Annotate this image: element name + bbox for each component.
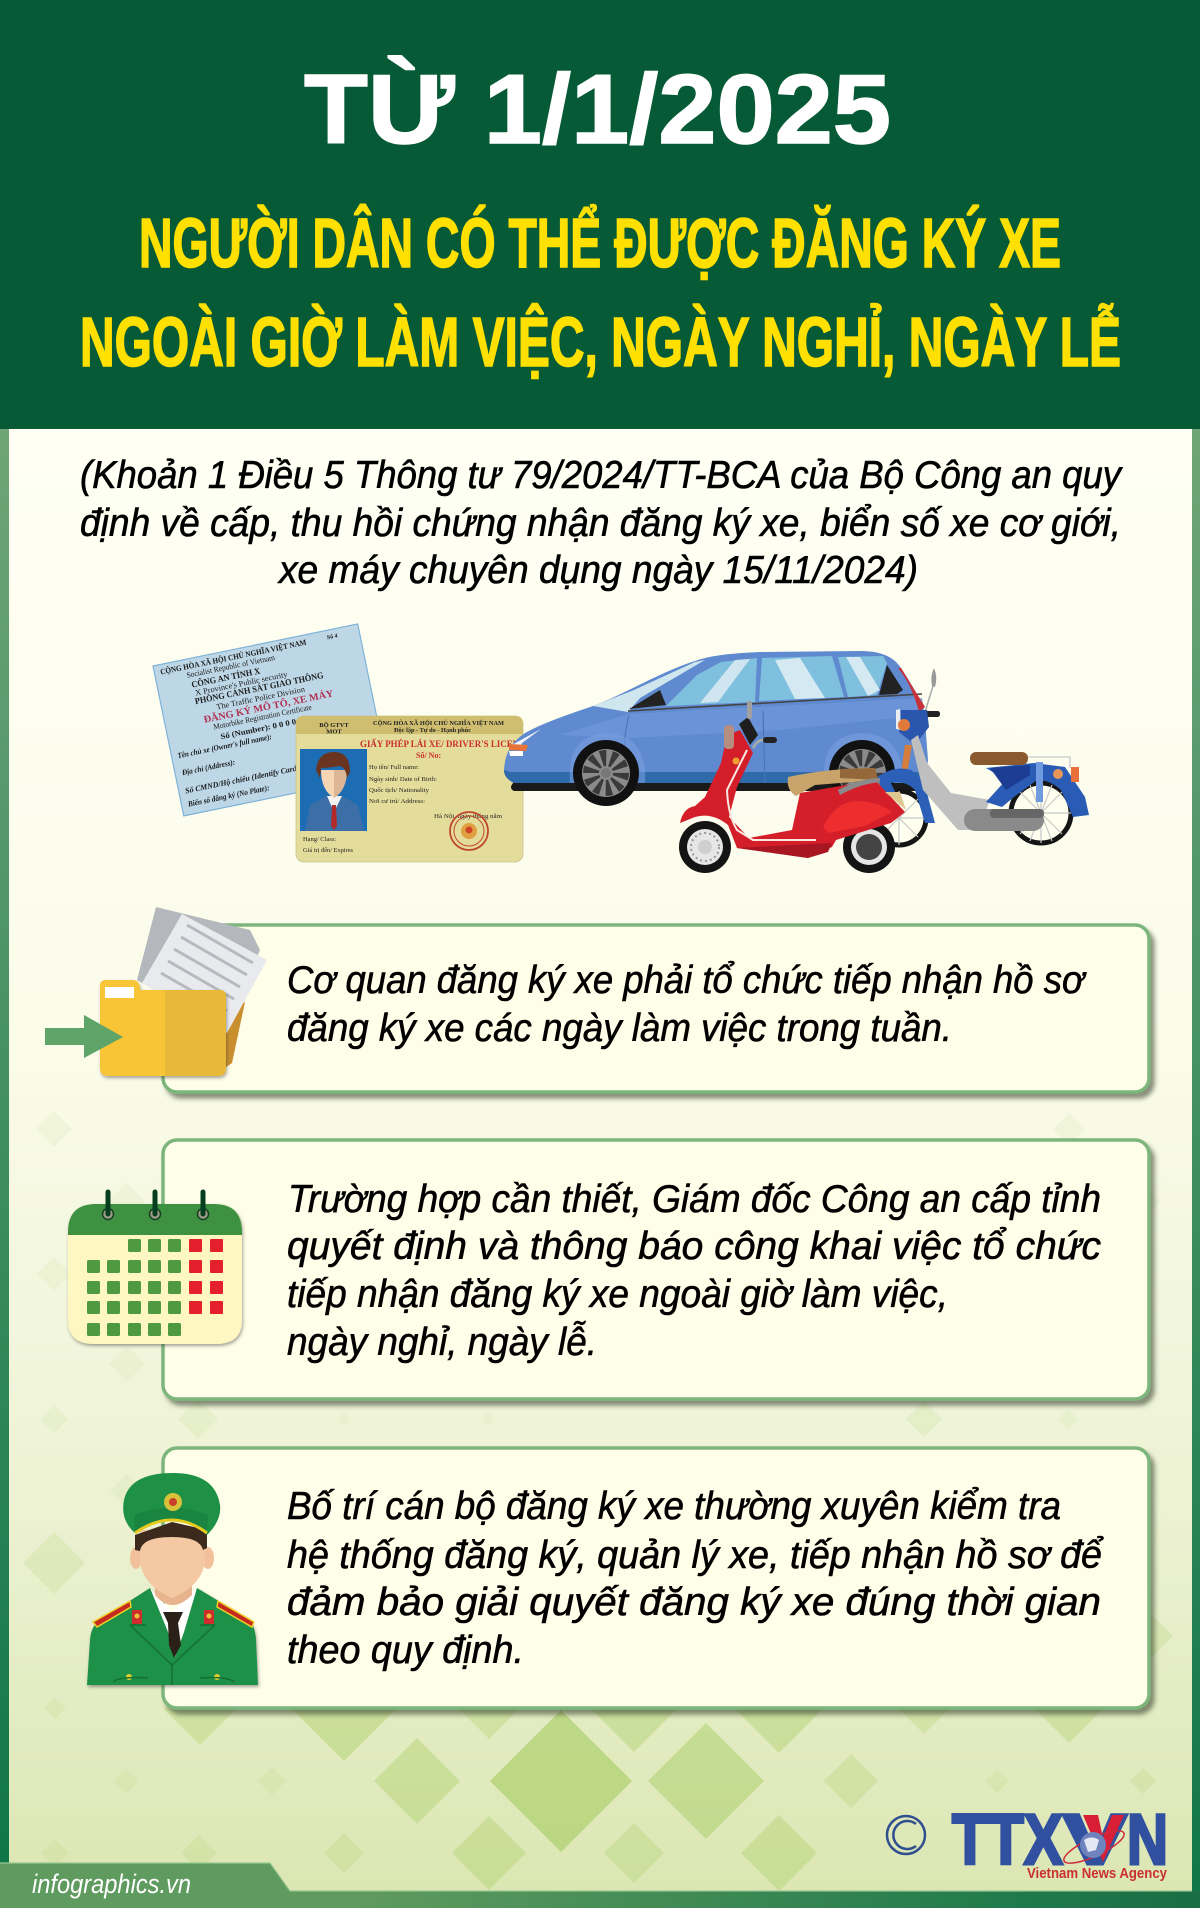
illustration: vehicle registration certificate: ĐĂNG KÝ MÔ TÔ, XE MÁY	[202, 686, 335, 726]
icon: calendar	[68, 1192, 242, 1344]
illustration: vehicle registration certificate: CÔNG AN TỈNH X	[191, 666, 262, 690]
illustration: driver's licence card: Độc lập - Tự do - Hạnh phúc	[394, 727, 471, 734]
illustration: driver's licence card: MOT	[326, 728, 342, 736]
page background	[0, 429, 1200, 1908]
illustration: driver's licence card: Hạng/ Class:	[303, 836, 336, 843]
illustration: driver's licence card: Quốc tịch/ Nationality	[369, 787, 430, 794]
logo: TTXVN Vietnam News Agency	[952, 1801, 1168, 1882]
card 3: Bố trí cán bộ đăng ký xe thường xuyên kiểm tra	[287, 1485, 1061, 1528]
card 3: hệ thống đăng ký, quản lý xe, tiếp nhận hồ sơ để	[287, 1534, 1104, 1577]
illustration: vehicle registration certificate: Số 4	[326, 632, 338, 641]
illustration: vehicle registration certificate: Biển số đăng ký (No Plate):	[186, 783, 271, 809]
illustration: driver's licence card: GIẤY PHÉP LÁI XE/ DRIVER'S LICENSE	[360, 739, 530, 749]
illustration: driver's licence card: Ngày sinh/ Date of Birth:	[369, 776, 437, 783]
illustration: driver's licence card: BỘ GTVT	[319, 721, 349, 729]
icon: police officer	[87, 1473, 258, 1685]
logo: TTXVN Vietnam News Agency: Vietnam News Agency	[1027, 1865, 1168, 1882]
illustration: blue moped	[872, 668, 1089, 845]
title: TỪ 1/1/2025	[304, 54, 891, 164]
illustration: red scooter	[679, 701, 906, 873]
illustration: vehicle registration certificate: Motorbike Registration Certificate	[213, 702, 313, 731]
illustration: driver's licence card: Số/ No:	[416, 751, 441, 760]
subtitle	[80, 203, 1121, 381]
illustration: vehicle registration certificate: Số (Number): 0 0 0 0 0 0	[220, 714, 310, 741]
legal source note: định về cấp, thu hồi chứng nhận đăng ký xe, biển số xe cơ giới,	[80, 502, 1121, 545]
illustration: vehicle registration certificate: PHÒNG CẢNH SÁT GIAO THÔNG	[194, 670, 324, 706]
illustration: driver's licence card: CỘNG HÒA XÃ HỘI CHỦ NGHĨA VIỆT NAM	[373, 719, 504, 727]
copyright symbol	[887, 1816, 925, 1854]
left green border	[0, 429, 9, 1869]
background diamond pattern	[23, 1111, 1173, 1891]
card 2	[163, 1140, 1149, 1399]
illustration: vehicle registration certificate: Tên chủ xe (Owner's full name):	[177, 732, 273, 760]
card 3: theo quy định.	[287, 1629, 524, 1672]
card 1: Cơ quan đăng ký xe phải tổ chức tiếp nhận hồ sơ	[287, 959, 1087, 1002]
legal source note: (Khoản 1 Điều 5 Thông tư 79/2024/TT-BCA của Bộ Công an quy	[80, 454, 1123, 497]
illustration: vehicle registration certificate: X Province's Public security	[194, 670, 288, 697]
header band	[0, 0, 1200, 429]
footer bar	[0, 1863, 1200, 1908]
legal source note: xe máy chuyên dụng ngày 15/11/2024)	[277, 549, 918, 592]
card 2: Trường hợp cần thiết, Giám đốc Công an cấp tỉnh	[288, 1178, 1101, 1221]
logo: TTXVN Vietnam News Agency: V	[1063, 1801, 1127, 1880]
illustration: vehicle registration certificate: Socialist Republic of Vietnam	[186, 653, 276, 680]
card 3: đảm bảo giải quyết đăng ký xe đúng thời gian	[287, 1581, 1101, 1624]
illustration: driver's licence card: Giá trị đến/ Expires	[303, 847, 353, 854]
illustration: vehicle registration certificate: Số CMND/Hộ chiếu (Identify Card No	[184, 762, 309, 795]
right green border	[1192, 429, 1200, 1899]
illustration: vehicle registration certificate	[153, 624, 388, 816]
illustration: vehicle registration certificate: CỘNG HÒA XÃ HỘI CHỦ NGHĨA VIỆT NAM	[159, 637, 308, 677]
logo: TTXVN Vietnam News Agency: TTX	[952, 1801, 1063, 1880]
logo: TTXVN Vietnam News Agency: N	[1127, 1801, 1168, 1880]
card 3	[163, 1448, 1149, 1708]
illustration: vehicle registration certificate: The Traffic Police Division	[216, 685, 306, 711]
card 2: quyết định và thông báo công khai việc tổ chức	[287, 1225, 1101, 1268]
illustration: car	[504, 651, 928, 806]
card 2: ngày nghỉ, ngày lễ.	[287, 1320, 597, 1364]
illustration: vehicle registration certificate: Địa chỉ (Address):	[180, 758, 236, 777]
illustration: driver's licence card: Nơi cư trú/ Address:	[369, 798, 425, 805]
card 2: tiếp nhận đăng ký xe ngoài giờ làm việc,	[287, 1273, 948, 1316]
illustration: driver's licence card: Hà Nội, ngày tháng năm	[434, 813, 502, 820]
illustration: driver's licence card	[296, 716, 530, 862]
legal source note	[80, 454, 1123, 592]
card 1: đăng ký xe các ngày làm việc trong tuần.	[287, 1007, 952, 1050]
illustration: driver's licence card: Họ tên/ Full name:	[369, 764, 419, 771]
footer site name: infographics.vn	[32, 1869, 191, 1899]
card 1	[163, 925, 1149, 1092]
icon: folder with documents and arrow	[45, 907, 267, 1076]
